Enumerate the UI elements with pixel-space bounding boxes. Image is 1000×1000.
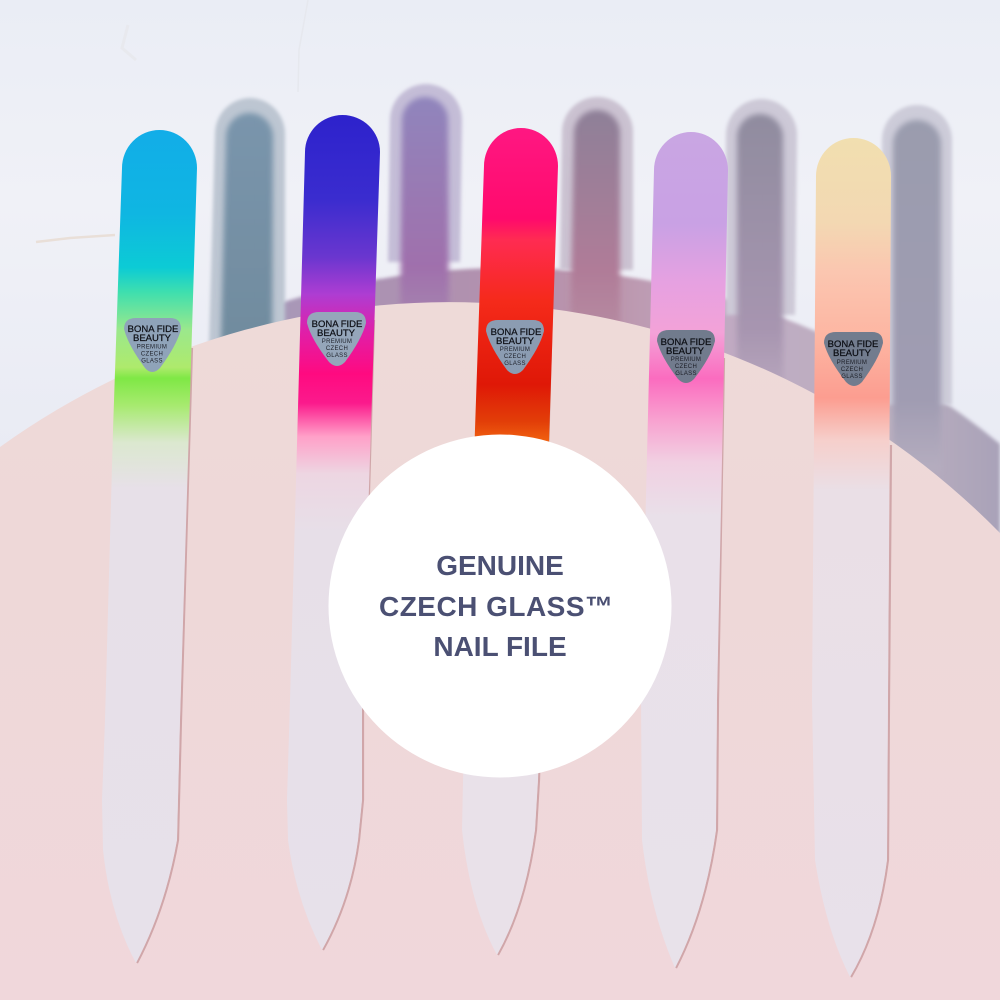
nail file: lilac to pink — [641, 132, 728, 968]
title text: CZECH GLASS™ — [379, 591, 613, 622]
badge: indigo file: BEAUTY — [317, 328, 356, 339]
shadow: peach file — [882, 105, 952, 470]
shadow: blue file — [208, 98, 285, 380]
badge: red file: BEAUTY — [496, 336, 535, 347]
badge: blue file: CZECH — [141, 352, 163, 358]
badge: blue file: BEAUTY — [133, 333, 172, 344]
badge: indigo file — [307, 312, 366, 366]
badge: lilac file: GLASS — [675, 371, 697, 377]
wall scuff marks — [36, 0, 308, 242]
shadow: red file — [560, 97, 633, 345]
badge: lilac file — [657, 330, 715, 383]
badge: indigo file: CZECH — [326, 346, 348, 352]
badge: indigo file: GLASS — [326, 353, 348, 359]
badge: lilac file: BEAUTY — [666, 346, 705, 357]
badge: lilac file: CZECH — [675, 364, 697, 370]
badge: red file: BONA FIDE — [491, 327, 541, 338]
badge: lilac file: PREMIUM — [671, 357, 701, 363]
badge: red file — [486, 320, 544, 374]
shadow: lilac file — [726, 99, 797, 400]
title text: NAIL FILE — [433, 631, 567, 662]
title text: GENUINE — [436, 550, 564, 581]
badge: peach file: GLASS — [841, 374, 863, 380]
nail file: blue to green — [102, 130, 197, 963]
nail file contact shadows on disc — [137, 310, 891, 977]
badge: lilac file: BONA FIDE — [661, 337, 711, 348]
badge: peach file — [824, 332, 883, 386]
badge: red file: PREMIUM — [500, 347, 530, 353]
nail file: pink to red — [462, 128, 558, 955]
white title circle — [328, 434, 672, 778]
badge: blue file: BONA FIDE — [128, 324, 178, 335]
pink arch disc — [0, 302, 1000, 1000]
shadow: violet file — [388, 84, 462, 345]
badge: peach file: BONA FIDE — [828, 339, 878, 350]
title text — [379, 550, 613, 662]
badge: peach file: CZECH — [841, 367, 863, 373]
badge: peach file: BEAUTY — [833, 348, 872, 359]
nail file: indigo to magenta — [287, 115, 380, 950]
badge: indigo file: BONA FIDE — [312, 319, 362, 330]
badge: blue file: GLASS — [141, 358, 163, 364]
badge: blue file — [124, 318, 181, 372]
nail file: peach to coral — [812, 138, 891, 977]
badge: red file: GLASS — [504, 361, 526, 367]
shadow of arch on wall — [280, 268, 1000, 700]
badge: indigo file: PREMIUM — [322, 339, 352, 345]
badge: peach file: PREMIUM — [837, 360, 867, 366]
badge: blue file: PREMIUM — [137, 344, 167, 350]
shadows of nail files on wall — [208, 84, 952, 470]
badge: red file: CZECH — [504, 354, 526, 360]
